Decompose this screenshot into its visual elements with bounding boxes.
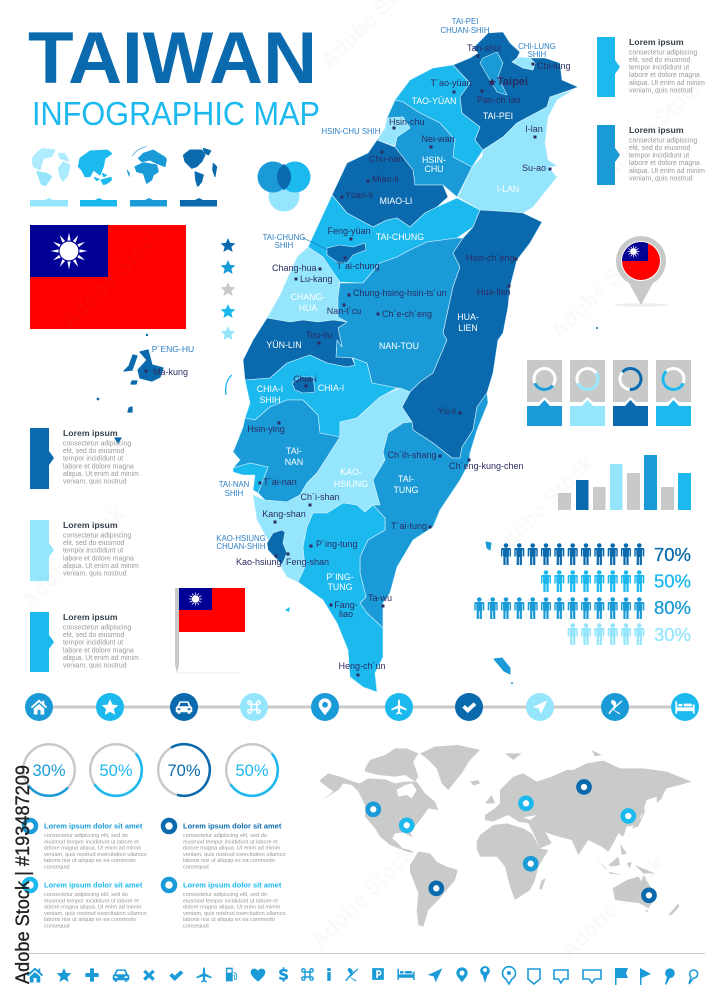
watermark marks: Adobe Stock: [596, 70, 709, 184]
people chart row 70%: 70%: [654, 544, 691, 565]
list item 3: consectetur adipiscing elit, sed do: [44, 892, 128, 898]
region labels: SHIH: [259, 395, 281, 405]
timeline icon: car: [170, 693, 198, 721]
city labels: Nei-wan: [421, 134, 455, 144]
map markers: [368, 782, 654, 901]
city labels: Hsin-ying: [247, 424, 285, 434]
timeline icon: bed: [671, 693, 699, 721]
gauge 70%: [149, 735, 219, 805]
panel: text block left 2: elit, sed do eiusmod: [63, 540, 124, 547]
list item 2: veniam, quis nostrud exercitation ullamco: [183, 852, 286, 858]
globe: cyan asia: [78, 150, 112, 184]
panel: text block right 1: labore et dolore magna: [629, 72, 700, 79]
panel: text block left 2: Lorem ipsum: [63, 520, 118, 530]
panel: text block left 3: elit, sed do eiusmod: [63, 632, 124, 639]
region: Tai-nan shih: [233, 463, 268, 493]
city labels: Kang-shan: [262, 509, 306, 519]
venn diagram: [258, 162, 310, 212]
region: Chia-i: [245, 355, 397, 437]
list item 2: [163, 820, 286, 870]
Japan: [632, 803, 645, 828]
list item 1: dolore magna aliqua. Ut enim ad minim: [44, 846, 142, 852]
list item 4: Lorem ipsum dolor sit amet: [183, 880, 282, 890]
region labels: HUA-: [457, 312, 479, 322]
timeline icon: check: [455, 693, 483, 721]
Iceland: [470, 780, 480, 786]
region labels: MIAO-LI: [380, 196, 412, 206]
city labels: Su-ao: [522, 163, 546, 173]
title: TAIWAN: [28, 18, 317, 99]
municipality labels: [152, 17, 556, 551]
panel: text block left 2: consectetur adipiscing: [63, 532, 131, 540]
icon timeline: [25, 693, 699, 721]
people chart row 30%: [568, 623, 691, 645]
region labels: TAO-YÜAN: [412, 96, 456, 106]
panel: text block right 1: aliqua. Ut enim ad minim: [629, 80, 705, 87]
list item 3: [24, 879, 147, 930]
list item 1: consequat: [44, 864, 70, 870]
list item 2: laboris nisi ut aliquip ex ea commodo: [183, 858, 275, 864]
city labels: T´ao-yüan: [430, 78, 472, 88]
region labels: I-LAN: [497, 184, 519, 194]
region: Tai-pei county: [453, 32, 578, 150]
region: Nan-tou: [336, 238, 463, 392]
city labels: Hsin-ch´eng: [466, 253, 515, 263]
municipality labels: TAI-PEI: [452, 17, 478, 26]
city labels: Chu-nan: [369, 154, 404, 164]
panel: text block right 1: tempor incididunt ut: [629, 64, 689, 72]
watermark marks: Adobe Stock: [556, 850, 669, 964]
people chart row 30%: 30%: [654, 624, 691, 645]
gauge 50%: [80, 734, 152, 806]
list item 3: consequat: [44, 924, 70, 930]
panel: text block left 1: tempor incididunt ut: [63, 456, 123, 463]
city labels: Heng-ch´un: [338, 661, 386, 671]
list item 3: eiusmod tempor incididunt ut labore et: [44, 898, 139, 904]
city labels: Ch´ih-shang: [387, 450, 437, 460]
region: Tao-yuan: [395, 65, 483, 167]
city labels: Ch´eng-kung-chen: [449, 461, 524, 471]
list item 2: dolore magna aliqua. Ut enim ad minim: [183, 846, 281, 852]
progress tiles: [527, 360, 691, 426]
panel: text block left 1: veniam, quis nostrud: [63, 478, 127, 486]
city labels: Hua-lien: [477, 287, 511, 297]
city labels: Taipei: [497, 76, 528, 88]
list item 3: dolore magna aliqua. Ut enim ad minim: [44, 905, 142, 911]
Sakhalin: [657, 790, 665, 803]
region labels: HUA: [299, 303, 317, 313]
panel: text block left 3: Lorem ipsum: [63, 612, 118, 622]
panel: text block left 2: [30, 520, 139, 581]
region labels: TAI-PEI: [483, 111, 513, 121]
Africa: [477, 823, 548, 900]
municipality labels: KAO-HSIUNG: [216, 534, 266, 543]
region: Ping-tung: [298, 503, 385, 692]
panel: text block right 2: aliqua. Ut enim ad minim: [629, 168, 705, 175]
municipality labels: TAI-CHUNG: [263, 233, 305, 242]
city labels: Miao-li: [372, 174, 399, 184]
panel: text block left 2: tempor incididunt ut: [63, 548, 123, 555]
panel: text block left 3: veniam, quis nostrud: [63, 662, 127, 670]
timeline icon: star: [96, 693, 124, 721]
region labels: HSIN-: [422, 155, 446, 165]
list item 2: consequat: [183, 864, 209, 870]
region labels: CHIA-I: [318, 383, 344, 393]
region labels: HSIUNG: [334, 479, 368, 489]
region: Tai-pei shih: [480, 52, 507, 95]
city labels: Fang-: [334, 600, 358, 610]
timeline icon: home: [25, 693, 53, 721]
city labels: I-lan: [525, 124, 543, 134]
timeline icon: pin: [311, 693, 339, 721]
city labels: liao: [339, 609, 353, 619]
region: Hsin-chu: [387, 100, 472, 197]
city labels: Feng-yüan: [327, 226, 371, 236]
tile 3: [613, 360, 648, 426]
region labels: TUNG: [328, 582, 353, 592]
list item 2: Lorem ipsum dolor sit amet: [183, 822, 282, 830]
panel: text block right 1: Lorem ipsum: [629, 37, 684, 47]
region: Chi-lung shih: [512, 57, 535, 70]
list item 3: Lorem ipsum dolor sit amet: [44, 880, 143, 890]
Madagascar: [539, 878, 546, 890]
region labels: YÜN-LIN: [266, 340, 302, 350]
globe: mid africa: [127, 147, 167, 183]
people chart row 70%: [501, 543, 691, 565]
list item 1: [24, 820, 147, 870]
city labels: Ta-wu: [368, 593, 392, 603]
panel: text block right 2: [597, 125, 705, 185]
region labels: TAI-: [398, 474, 414, 484]
gauge 70%: 70%: [167, 762, 201, 780]
panel: text block right 2: Lorem ipsum: [629, 125, 684, 135]
Arctic islands: [365, 748, 418, 782]
region labels: P´ING-: [326, 572, 354, 582]
globe bases: [30, 198, 217, 206]
list item 2: consectetur adipiscing elit, sed do: [183, 833, 267, 839]
municipality labels: CHUAN-SHIH: [441, 26, 489, 35]
region: Hua-lien: [402, 210, 542, 458]
municipality labels: SHIH: [275, 241, 293, 250]
Svalbard: [505, 753, 522, 760]
list item 2: eiusmod tempor incididunt ut labore et: [183, 839, 278, 845]
tile 4: [656, 360, 691, 426]
globe: dark americas: [183, 148, 217, 187]
city labels: Hsin-chu: [389, 117, 425, 127]
Eurasia: [485, 761, 692, 855]
capital star: [488, 78, 496, 86]
gauge 30%: [13, 734, 85, 806]
region labels: TUNG: [394, 485, 419, 495]
gauge 30%: 30%: [32, 762, 66, 780]
panel: text block left 1: labore et dolore magna: [63, 463, 134, 470]
timeline icon: plane: [385, 693, 413, 721]
Australia: [613, 875, 657, 908]
panel: text block left 1: elit, sed do eiusmod: [63, 448, 124, 455]
leader line Tai-chung shih: [303, 238, 328, 250]
panel: text block left 3: consectetur adipiscing: [63, 624, 131, 632]
region: Kao-hsiung shih: [267, 530, 287, 565]
city labels: T´ai-nan: [263, 477, 297, 487]
region: Tai-nan: [233, 400, 340, 502]
list item 4: [163, 879, 286, 930]
city labels: Kao-hsiung: [236, 557, 282, 567]
panel: text block left 3: tempor incididunt ut: [63, 640, 123, 647]
region labels: CHIA-I: [257, 384, 283, 394]
municipality labels: CHUAN-SHIH: [217, 542, 265, 551]
region labels: KAO-: [340, 467, 362, 477]
Greenland: [420, 745, 480, 790]
people chart row 80%: 80%: [654, 597, 691, 618]
map pin with flag: [614, 236, 668, 307]
list item 1: veniam, quis nostrud exercitation ullamco: [44, 852, 147, 858]
bar chart: [558, 455, 691, 510]
region: Kao-hsiung: [253, 388, 412, 582]
panel: text block right 1: elit, sed do eiusmod: [629, 57, 690, 64]
panel: text block left 2: veniam, quis nostrud: [63, 570, 127, 578]
municipality labels: P´ENG-HU: [152, 344, 194, 354]
city labels: P´ing-tung: [316, 539, 358, 549]
flag of Taiwan: [30, 225, 186, 329]
panel: text block left 3: [30, 612, 139, 672]
Southeast Asian islands: [593, 857, 608, 870]
city labels: Chia-i: [293, 374, 317, 384]
people chart row 50%: [541, 570, 691, 592]
region labels: LIEN: [458, 323, 478, 333]
list item 4: consequat: [183, 924, 209, 930]
region labels: [257, 96, 519, 592]
region: Tai-chung shih: [327, 243, 366, 263]
list item 4: laboris nisi ut aliquip ex ea commodo: [183, 917, 275, 923]
globes row: [32, 147, 217, 187]
region: Chang-hua: [267, 247, 347, 322]
municipality labels: SHIH: [528, 50, 546, 59]
list item 4: dolore magna aliqua. Ut enim ad minim: [183, 905, 281, 911]
panel: text block right 1: consectetur adipiscing: [629, 50, 697, 56]
list item 1: consectetur adipiscing elit, sed do: [44, 833, 128, 839]
world map: Africa, Eurasia and Oceania: [477, 750, 692, 915]
city labels: Yü-li: [438, 406, 456, 416]
Russian Arctic islands: [592, 750, 602, 757]
region labels: CHU: [424, 164, 444, 174]
city markers: [144, 54, 552, 676]
South America: [410, 852, 458, 927]
watermark marks: Adobe Stock: [546, 230, 659, 344]
region labels: TAI-: [286, 446, 302, 456]
region: Miao-li: [332, 140, 448, 227]
New Zealand: [668, 903, 679, 915]
tile 2: [570, 360, 605, 426]
gauge 50% second: [216, 734, 288, 806]
region: Yun-lin: [243, 318, 355, 380]
list item 4: veniam, quis nostrud exercitation ullamco: [183, 911, 286, 917]
tile 1: [527, 360, 562, 426]
timeline icon: command: [240, 693, 268, 721]
panel: text block right 2: consectetur adipiscing: [629, 138, 697, 144]
list item 3: veniam, quis nostrud exercitation ullamco: [44, 911, 147, 917]
list item 1: Lorem ipsum dolor sit amet: [44, 822, 143, 830]
region: Tai-tung: [360, 393, 488, 628]
list item 4: eiusmod tempor incididunt ut labore et: [183, 898, 278, 904]
panel: text block left 1: consectetur adipiscing: [63, 440, 131, 448]
city labels: Tan-shui: [467, 43, 501, 53]
world map: Americas and Greenland: [320, 745, 480, 927]
city labels: Chung-hsing-hsin-ts´un: [353, 288, 447, 298]
city labels: Feng-shan: [286, 557, 329, 567]
region labels: CHANG-: [291, 292, 325, 302]
municipality labels: CHI-LUNG: [518, 42, 556, 51]
watermark marks: Adobe Stock: [486, 450, 599, 564]
list item 1: eiusmod tempor incididunt ut labore et: [44, 839, 139, 845]
city labels: [153, 43, 571, 671]
city labels: Pan-ch´iao: [477, 95, 521, 105]
city labels: Chi-lung: [537, 61, 571, 71]
region: Hsin-chu shih: [377, 117, 410, 146]
panel: text block left 2: labore et dolore magna: [63, 555, 134, 562]
city labels: Ch´e-ch´eng: [382, 309, 432, 319]
timeline icon: cutlery: [601, 693, 629, 721]
city labels: Chang-hua: [272, 263, 317, 273]
subtitle: INFOGRAPHIC MAP: [32, 96, 320, 133]
watermark marks: Adobe Stock: [306, 840, 419, 954]
British Isles: [485, 795, 495, 803]
city labels: Lu-kang: [300, 274, 333, 284]
Tasmania: [645, 910, 648, 913]
globe: light: [32, 148, 70, 187]
city labels: Yüan-li: [345, 190, 373, 200]
list item 3: laboris nisi ut aliquip ex ea commodo: [44, 917, 136, 923]
region: Tai-chung: [308, 195, 480, 283]
people chart row 80%: [474, 597, 691, 619]
panel: text block left 1: aliqua. Ut enim ad minim: [63, 471, 139, 478]
city labels: Nan-t´cu: [327, 306, 361, 316]
panel: text block left 1: Lorem ipsum: [63, 428, 118, 438]
municipality labels: SHIH: [225, 489, 243, 498]
map of Taiwan: [233, 32, 578, 692]
city labels: Tou-liu: [306, 330, 332, 340]
region labels: TAI-CHUNG: [376, 232, 424, 242]
panel: text block right 1: [597, 37, 705, 97]
divider line: [28, 953, 705, 954]
world map: [320, 745, 692, 927]
panel: text block right 2: labore et dolore magna: [629, 160, 700, 167]
panel: text block right 1: veniam, quis nostrud: [629, 87, 693, 94]
panel: text block left 2: aliqua. Ut enim ad minim: [63, 563, 139, 570]
stock image id: Adobe Stock | #193487209: [12, 765, 34, 984]
city labels: Ma-kung: [153, 367, 188, 377]
stars: [221, 238, 235, 340]
watermark marks: Adobe Stock: [16, 500, 129, 614]
list item 1: laboris nisi ut aliquip ex ea commodo: [44, 858, 136, 864]
islands: [97, 334, 163, 443]
panel: text block right 2: tempor incididunt ut: [629, 152, 689, 160]
gauge 50%: 50%: [99, 762, 133, 780]
North America: [320, 773, 438, 853]
panel: text block right 2: elit, sed do eiusmod: [629, 145, 690, 152]
bottom icon row: [27, 966, 698, 985]
municipality labels: TAI-NAN: [219, 480, 249, 489]
panel: text block right 2: veniam, quis nostrud: [629, 175, 693, 182]
watermark marks: Adobe Stock: [56, 220, 169, 334]
panel: text block left 3: aliqua. Ut enim ad minim: [63, 655, 139, 662]
panel: text block left 1: [30, 428, 139, 489]
list item 4: consectetur adipiscing elit, sed do: [183, 892, 267, 898]
city labels: Ch´i-shan: [300, 492, 340, 502]
municipality labels: HSIN-CHU SHIH: [322, 127, 380, 136]
small islands east and west: [226, 327, 598, 684]
region: I-lan: [458, 90, 573, 213]
region: Chia-i shih: [292, 377, 315, 393]
panel: text block left 3: labore et dolore magna: [63, 647, 134, 654]
flag on pole: [175, 588, 245, 674]
people chart row 50%: 50%: [654, 570, 691, 592]
timeline icon: navigation: [526, 693, 554, 721]
gauge 50% second: 50%: [235, 762, 269, 780]
region labels: NAN-TOU: [379, 341, 419, 351]
city labels: T´ai-tung: [391, 521, 427, 531]
city labels: T´ai-chung: [336, 261, 380, 271]
region labels: NAN: [285, 457, 303, 467]
